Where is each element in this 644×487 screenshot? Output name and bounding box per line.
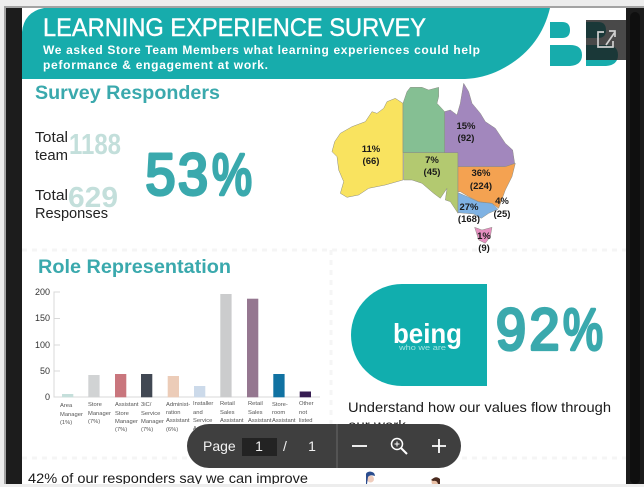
category labels: Administ-	[166, 402, 190, 408]
page total: 1	[308, 438, 316, 454]
logo	[550, 22, 618, 66]
map labels: 7%	[425, 155, 439, 166]
map region: Queensland	[445, 83, 515, 167]
category labels: room	[272, 410, 285, 416]
response rate 53%: 3	[178, 142, 208, 208]
map labels: 11%	[362, 144, 381, 155]
map labels: 27%	[459, 202, 479, 213]
bottom strip	[0, 484, 644, 487]
map labels: (45)	[424, 167, 440, 178]
category labels: Sales	[248, 410, 263, 416]
title: LEARNING EXPERIENCE SURVEY	[43, 14, 426, 42]
values caption: our work.	[348, 417, 410, 433]
category labels: (2%)	[299, 426, 311, 432]
icon: zoom	[392, 438, 407, 454]
category labels: Service	[193, 418, 212, 424]
category labels: Assistant	[220, 418, 244, 424]
category labels: Sales	[220, 410, 235, 416]
map labels: (25)	[494, 209, 510, 220]
total team stat: 1188	[69, 129, 121, 161]
figures peeking at bottom	[366, 472, 440, 486]
category labels: Area	[60, 403, 73, 409]
page label: Page	[203, 438, 236, 454]
y axis labels: 100	[35, 340, 50, 350]
being badge	[351, 284, 487, 386]
map region: South Australia	[404, 153, 458, 213]
header subtitle: We asked Store Team Members what learning experiences could help	[43, 43, 480, 57]
map labels: 36%	[471, 168, 491, 179]
category labels: (F/T &	[220, 426, 236, 432]
map region: New South Wales	[458, 163, 515, 208]
values stat 92%: 2	[530, 298, 560, 362]
category labels: Manager	[88, 411, 111, 417]
map labels: 15%	[456, 121, 476, 132]
category labels: Store-	[272, 402, 288, 408]
total responses stat: 629	[68, 182, 118, 214]
category labels: Assistant	[115, 402, 139, 408]
map region: Victoria	[458, 193, 498, 218]
category labels: Assistant	[272, 418, 296, 424]
pdf toolbar	[187, 424, 461, 468]
values stat 92%: 9	[496, 298, 526, 362]
response rate 53%: 5	[146, 142, 176, 208]
category labels: 3iC/	[141, 402, 152, 408]
values stat 92%	[496, 298, 603, 362]
values stat 92%: %	[563, 298, 603, 362]
category labels: (30%)	[248, 434, 264, 440]
map labels: (9)	[478, 243, 490, 254]
icon: zoom out	[352, 445, 367, 447]
bars	[62, 294, 311, 397]
category labels: Other	[299, 401, 314, 407]
being tagline: who we are	[398, 345, 446, 352]
category labels: (7%)	[115, 427, 127, 433]
category labels: Store	[115, 411, 129, 417]
page number: 1	[255, 438, 263, 454]
map labels: 4%	[495, 196, 509, 207]
icon: open in new window	[586, 20, 626, 60]
y axis labels: 150	[35, 313, 50, 323]
map labels: (92)	[458, 133, 474, 144]
section dividers	[22, 250, 626, 458]
map region: Tasmania	[475, 227, 492, 243]
map region: Northern Territory	[403, 87, 445, 153]
page separator: /	[283, 438, 287, 454]
australia map	[332, 83, 515, 254]
response rate 53%	[146, 142, 252, 208]
total responses stat: Responses	[35, 205, 108, 222]
category labels: Store	[88, 402, 102, 408]
category labels: (7%)	[272, 426, 284, 432]
total team stat	[35, 129, 121, 164]
y axis labels: 200	[35, 287, 50, 297]
y axis labels: 50	[40, 366, 50, 376]
y axis labels: 0	[45, 392, 50, 402]
category labels: Assistant	[193, 426, 217, 432]
category labels: Retail	[220, 401, 235, 407]
category labels: (3%)	[193, 434, 205, 440]
map labels: (168)	[458, 214, 480, 225]
category labels: Installer	[193, 401, 213, 407]
being wordmark: being	[393, 318, 462, 349]
response rate 53%: %	[212, 142, 252, 208]
category labels: Manager	[60, 412, 83, 418]
category labels: Assistant	[248, 418, 272, 424]
map labels: (224)	[470, 181, 492, 192]
values caption: Understand how our values flow through	[348, 399, 611, 415]
heading: survey responders: Survey Responders	[35, 83, 220, 104]
total team stat: team	[35, 147, 68, 164]
category labels: Assistant	[166, 418, 190, 424]
chart axes	[54, 292, 320, 397]
map labels: (66)	[363, 156, 379, 167]
category labels: ration	[166, 410, 181, 416]
category labels	[60, 401, 314, 440]
total responses stat: Total	[35, 187, 68, 204]
category labels: and	[193, 410, 203, 416]
category labels: P/T)	[220, 434, 231, 440]
values caption	[348, 399, 611, 433]
category labels: Manager	[115, 419, 138, 425]
icon: zoom in	[432, 439, 446, 453]
heading: role representation: Role Representation	[38, 257, 231, 278]
header subtitle	[43, 43, 480, 72]
map labels: 1%	[477, 231, 491, 242]
category labels: (1%)	[60, 420, 72, 426]
category labels: Service	[141, 411, 160, 417]
map labels	[362, 121, 510, 254]
map region: Western Australia	[332, 98, 403, 197]
category labels: (6%)	[166, 427, 178, 433]
total team stat: Total	[35, 129, 68, 146]
category labels: (7%)	[141, 427, 153, 433]
category labels: Casual	[248, 426, 266, 432]
category labels: Retail	[248, 401, 263, 407]
category labels: (7%)	[88, 419, 100, 425]
category labels: Manager	[141, 419, 164, 425]
bar chart	[35, 287, 320, 440]
category labels: listed	[299, 418, 313, 424]
y axis labels	[35, 287, 50, 402]
category labels: not	[299, 410, 307, 416]
total responses stat	[35, 182, 118, 222]
page input	[242, 438, 277, 456]
header subtitle: peformance & engagement at work.	[43, 58, 268, 72]
header banner	[22, 8, 550, 79]
improvement statement: 42% of our responders say we can improve	[28, 470, 308, 486]
